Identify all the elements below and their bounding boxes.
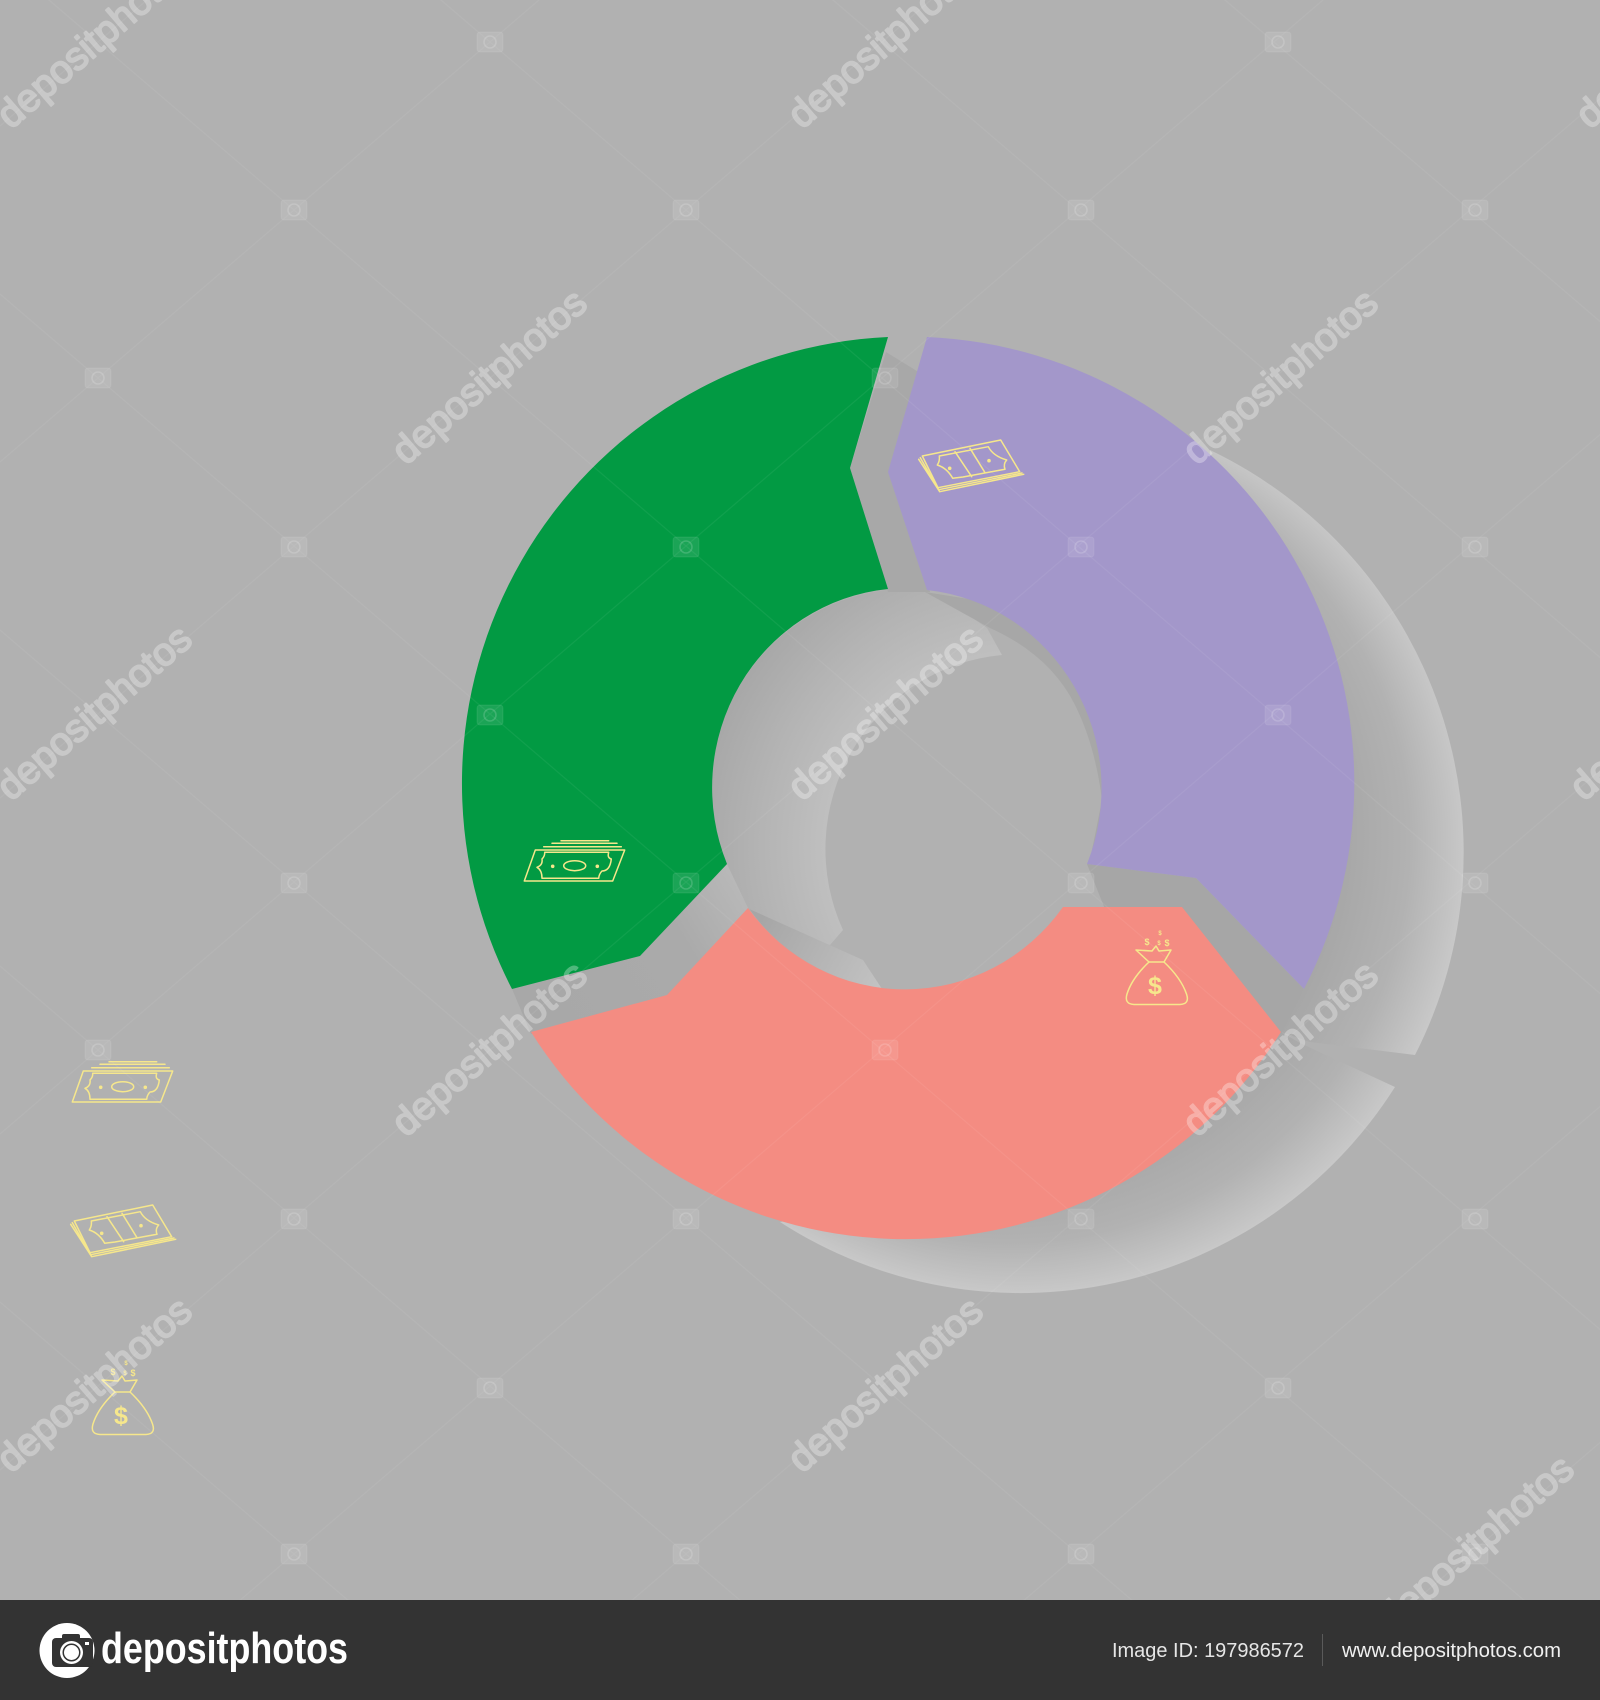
gap shadow between purple and salmon bbox=[1087, 864, 1304, 1034]
crescent shadow along purple segment bbox=[926, 592, 1102, 845]
footer bar bbox=[0, 1600, 1600, 1700]
shadow of salmon segment bbox=[780, 1032, 1395, 1293]
watermark: diagonal text: depositphotos bbox=[780, 1289, 991, 1481]
icon: banknote on green segment bbox=[524, 841, 625, 881]
shadow of purple segment bbox=[1200, 450, 1464, 1055]
logo: camera badge bbox=[40, 1623, 94, 1678]
watermark: diagonal text: depositphotos bbox=[384, 281, 595, 473]
icon: money bag legend bbox=[92, 1361, 153, 1434]
icon: money bag legend: $ bbox=[124, 1361, 128, 1367]
icon: money bag on salmon segment bbox=[1126, 931, 1187, 1004]
watermark: diagonal text: depositphotos bbox=[1175, 953, 1386, 1145]
watermark: diagonal text: depositphotos bbox=[1175, 281, 1386, 473]
icon: banknote stack on purple segment bbox=[919, 440, 1024, 492]
icon: banknote legend bbox=[72, 1062, 173, 1102]
purple segment bbox=[888, 337, 1354, 989]
image id: Image ID: 197986572 bbox=[1112, 1640, 1304, 1662]
gap shadow between green and salmon bbox=[512, 864, 748, 1034]
icon: money bag on salmon segment: $ bbox=[1148, 972, 1162, 1000]
green segment bbox=[462, 337, 888, 989]
icon: money bag legend: $ bbox=[114, 1402, 128, 1430]
watermark: diagonal text: depositphotos bbox=[1371, 1447, 1582, 1639]
website url: www.depositphotos.com bbox=[1341, 1640, 1561, 1662]
centre hole shadows bbox=[713, 592, 1102, 988]
gap shadow between green and purple bbox=[850, 352, 930, 592]
icon: money bag on salmon segment: $ bbox=[1158, 931, 1162, 937]
watermark: camera marks bbox=[85, 32, 1488, 1564]
logo wordmark: depositphotos bbox=[101, 1624, 348, 1673]
icon: money bag on salmon segment: $ bbox=[1144, 937, 1150, 947]
watermark: diagonal text: depositphotos bbox=[780, 617, 991, 809]
watermark: diagonal text: depositphotos bbox=[384, 953, 595, 1145]
icon: banknote stack legend bbox=[71, 1205, 176, 1257]
salmon segment bbox=[531, 907, 1281, 1239]
panel: donut chart bbox=[462, 337, 1354, 1239]
crescent shadow of green segment bbox=[713, 623, 1002, 945]
icon: money bag legend: $ bbox=[110, 1367, 116, 1377]
icon: money bag legend: $ bbox=[123, 1371, 127, 1377]
icon: money bag legend: $ bbox=[130, 1368, 136, 1378]
strip shadow of salmon segment bbox=[750, 910, 881, 988]
icon: money bag on salmon segment: $ bbox=[1164, 938, 1170, 948]
icon: money bag on salmon segment: $ bbox=[1157, 941, 1161, 947]
